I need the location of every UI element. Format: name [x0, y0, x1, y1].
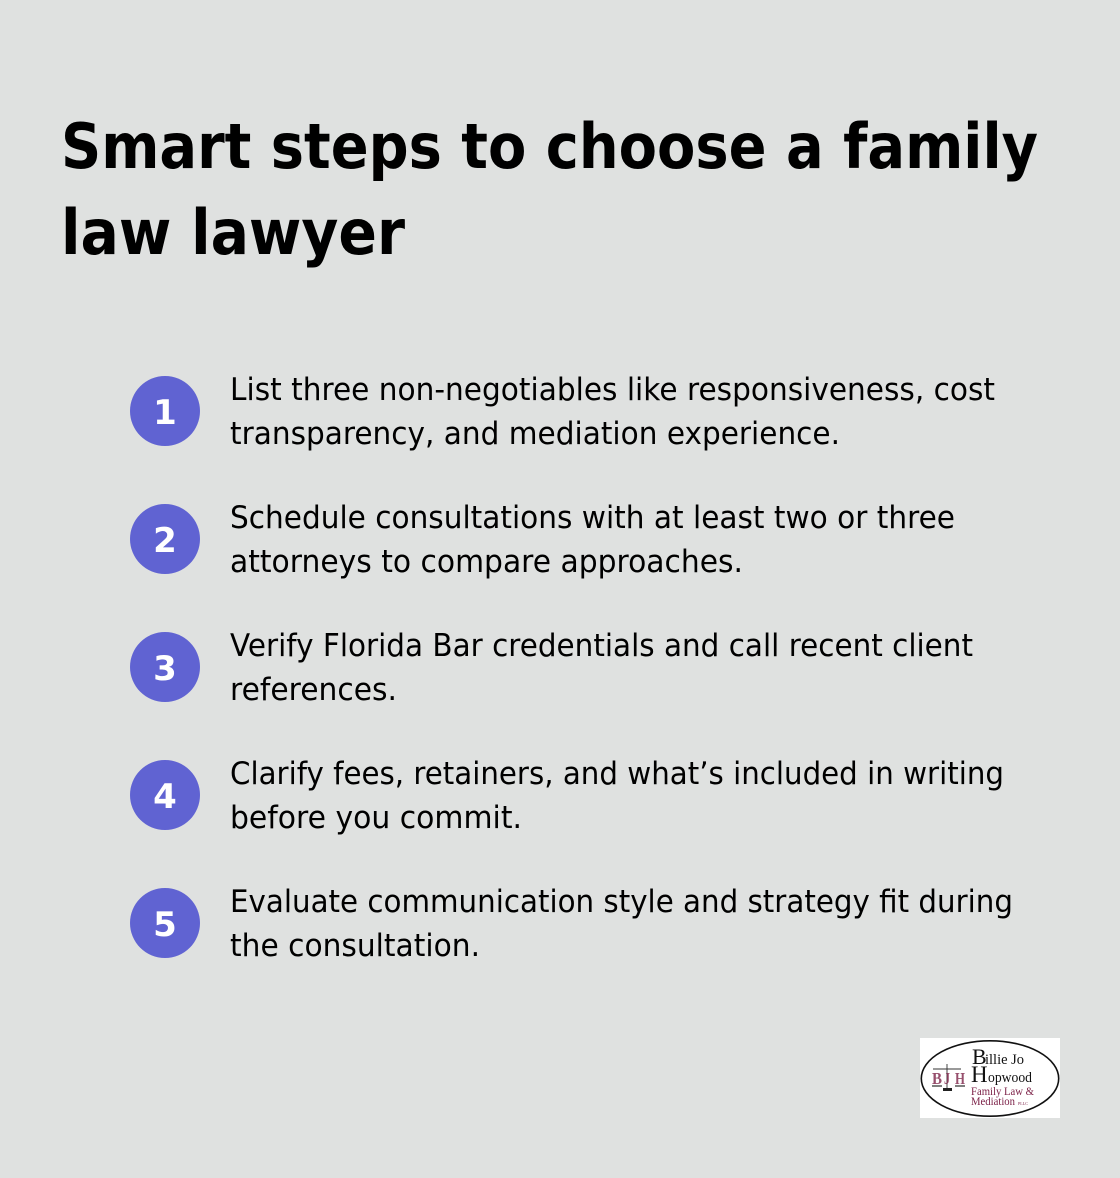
- logo: Mediation: [971, 1094, 1015, 1108]
- number badge 1: 1: [153, 393, 177, 433]
- step 4: [130, 756, 1004, 836]
- icon: scales of justice: H: [955, 1069, 965, 1088]
- number badge 3: 3: [153, 649, 177, 689]
- step 2 text: Schedule consultations with at least two or three: [230, 500, 955, 536]
- title: Smart steps to choose a family: [61, 110, 1038, 183]
- step 5 text: [230, 884, 1013, 964]
- title: law lawyer: [61, 196, 405, 269]
- step 1: [130, 372, 995, 452]
- step 2 text: attorneys to compare approaches.: [230, 544, 743, 580]
- step 5 text: Evaluate communication style and strategy fit during: [230, 884, 1013, 920]
- number badge 2: 2: [153, 521, 177, 561]
- number badge 5: [130, 888, 200, 958]
- step 5: [130, 884, 1013, 964]
- number badge 5: 5: [153, 905, 177, 945]
- step 3 text: references.: [230, 672, 397, 708]
- number badge 1: [130, 376, 200, 446]
- icon: scales of justice: [932, 1064, 965, 1091]
- number badge 3: [130, 632, 200, 702]
- logo: PLLC: [1018, 1101, 1028, 1106]
- logo: Family Law &: [971, 1084, 1035, 1098]
- logo: B: [972, 1044, 987, 1069]
- title: [61, 110, 1038, 269]
- logo: opwood: [988, 1070, 1033, 1086]
- icon: scales of justice: J: [944, 1069, 950, 1088]
- logo: H: [971, 1062, 988, 1087]
- number badge 4: [130, 760, 200, 830]
- logo: illie Jo: [985, 1052, 1024, 1068]
- number badge 4: 4: [153, 777, 177, 817]
- step 1 text: transparency, and mediation experience.: [230, 416, 840, 452]
- step 1 text: List three non-negotiables like responsiveness, cost: [230, 372, 995, 408]
- step 3 text: Verify Florida Bar credentials and call recent client: [230, 628, 973, 664]
- icon: scales of justice: B: [932, 1069, 942, 1088]
- step 2 text: [230, 500, 955, 580]
- logo: [920, 1038, 1060, 1118]
- step 1 text: [230, 372, 995, 452]
- step 5 text: the consultation.: [230, 928, 480, 964]
- step 3 text: [230, 628, 973, 708]
- number badge 2: [130, 504, 200, 574]
- step 3: [130, 628, 973, 708]
- step 4 text: [230, 756, 1004, 836]
- step 2: [130, 500, 955, 580]
- step 4 text: before you commit.: [230, 800, 522, 836]
- step 4 text: Clarify fees, retainers, and what’s included in writing: [230, 756, 1004, 792]
